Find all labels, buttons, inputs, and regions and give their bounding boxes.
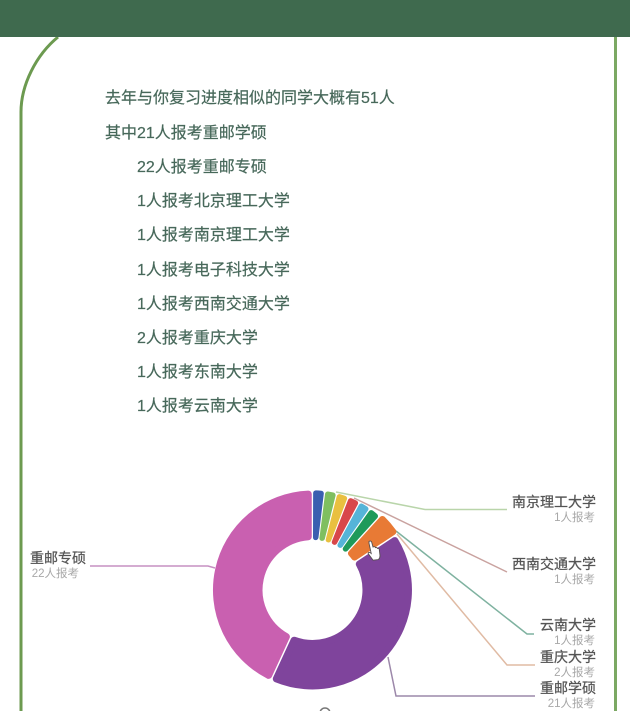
text block: summary of applications: 1人报考南京理工大学 (137, 226, 290, 244)
segment: 重邮专硕 22人 (216, 494, 308, 675)
text block: summary of applications: 22人报考重邮专硕 (137, 158, 267, 176)
label: 重邮学硕: 重邮学硕 (540, 680, 596, 696)
label: 南京理工大学 (512, 494, 596, 524)
segment: 重邮学硕 21人 (276, 541, 408, 686)
segment: 东南大学 1人 (338, 506, 366, 547)
label: 南京理工大学: 南京理工大学 (512, 494, 596, 510)
text block: summary of applications: 1人报考电子科技大学 (137, 261, 290, 279)
text block: summary of applications: 1人报考西南交通大学 (137, 295, 290, 313)
label: 重庆大学: 2人报考 (554, 665, 595, 679)
label: 西南交通大学: 1人报考 (554, 572, 595, 586)
label: 重邮专硕 (30, 550, 86, 580)
segment: 电子科技大学 1人 (326, 497, 344, 541)
text block: summary of applications (105, 89, 395, 415)
header bar (0, 0, 630, 37)
segment: 重庆大学 2人 (348, 519, 393, 562)
segment: 西南交通大学 1人 (332, 501, 355, 543)
icon: partial circle at bottom edge (320, 708, 330, 711)
label: 西南交通大学 (512, 556, 596, 586)
label: 重庆大学 (540, 649, 596, 679)
icon: hand cursor (368, 541, 380, 560)
label: 南京理工大学: 1人报考 (554, 510, 595, 524)
label: 重邮专硕: 22人报考 (32, 566, 79, 580)
segment: 云南大学 1人 (344, 513, 375, 551)
leader lines (90, 492, 535, 696)
label: 云南大学 (540, 617, 596, 647)
segment: 南京理工大学 1人 (320, 494, 333, 539)
text block: summary of applications: 2人报考重庆大学 (137, 329, 258, 347)
label: 西南交通大学: 西南交通大学 (512, 556, 596, 572)
label: 云南大学: 云南大学 (540, 617, 596, 633)
label: 重邮学硕: 21人报考 (548, 696, 595, 710)
segment: 北京理工大学 1人 (313, 493, 321, 538)
donut chart (216, 493, 408, 686)
text block: summary of applications: 1人报考北京理工大学 (137, 192, 290, 210)
label: 云南大学: 1人报考 (554, 633, 595, 647)
label: 重邮专硕: 重邮专硕 (30, 550, 86, 566)
text block: summary of applications: 去年与你复习进度相似的同学大概有51人 (105, 89, 395, 107)
label: 重邮学硕 (540, 680, 596, 710)
text block: summary of applications: 1人报考东南大学 (137, 363, 258, 381)
label: 重庆大学: 重庆大学 (540, 649, 596, 665)
text block: summary of applications: 其中21人报考重邮学硕 (105, 124, 267, 142)
text block: summary of applications: 1人报考云南大学 (137, 397, 258, 415)
